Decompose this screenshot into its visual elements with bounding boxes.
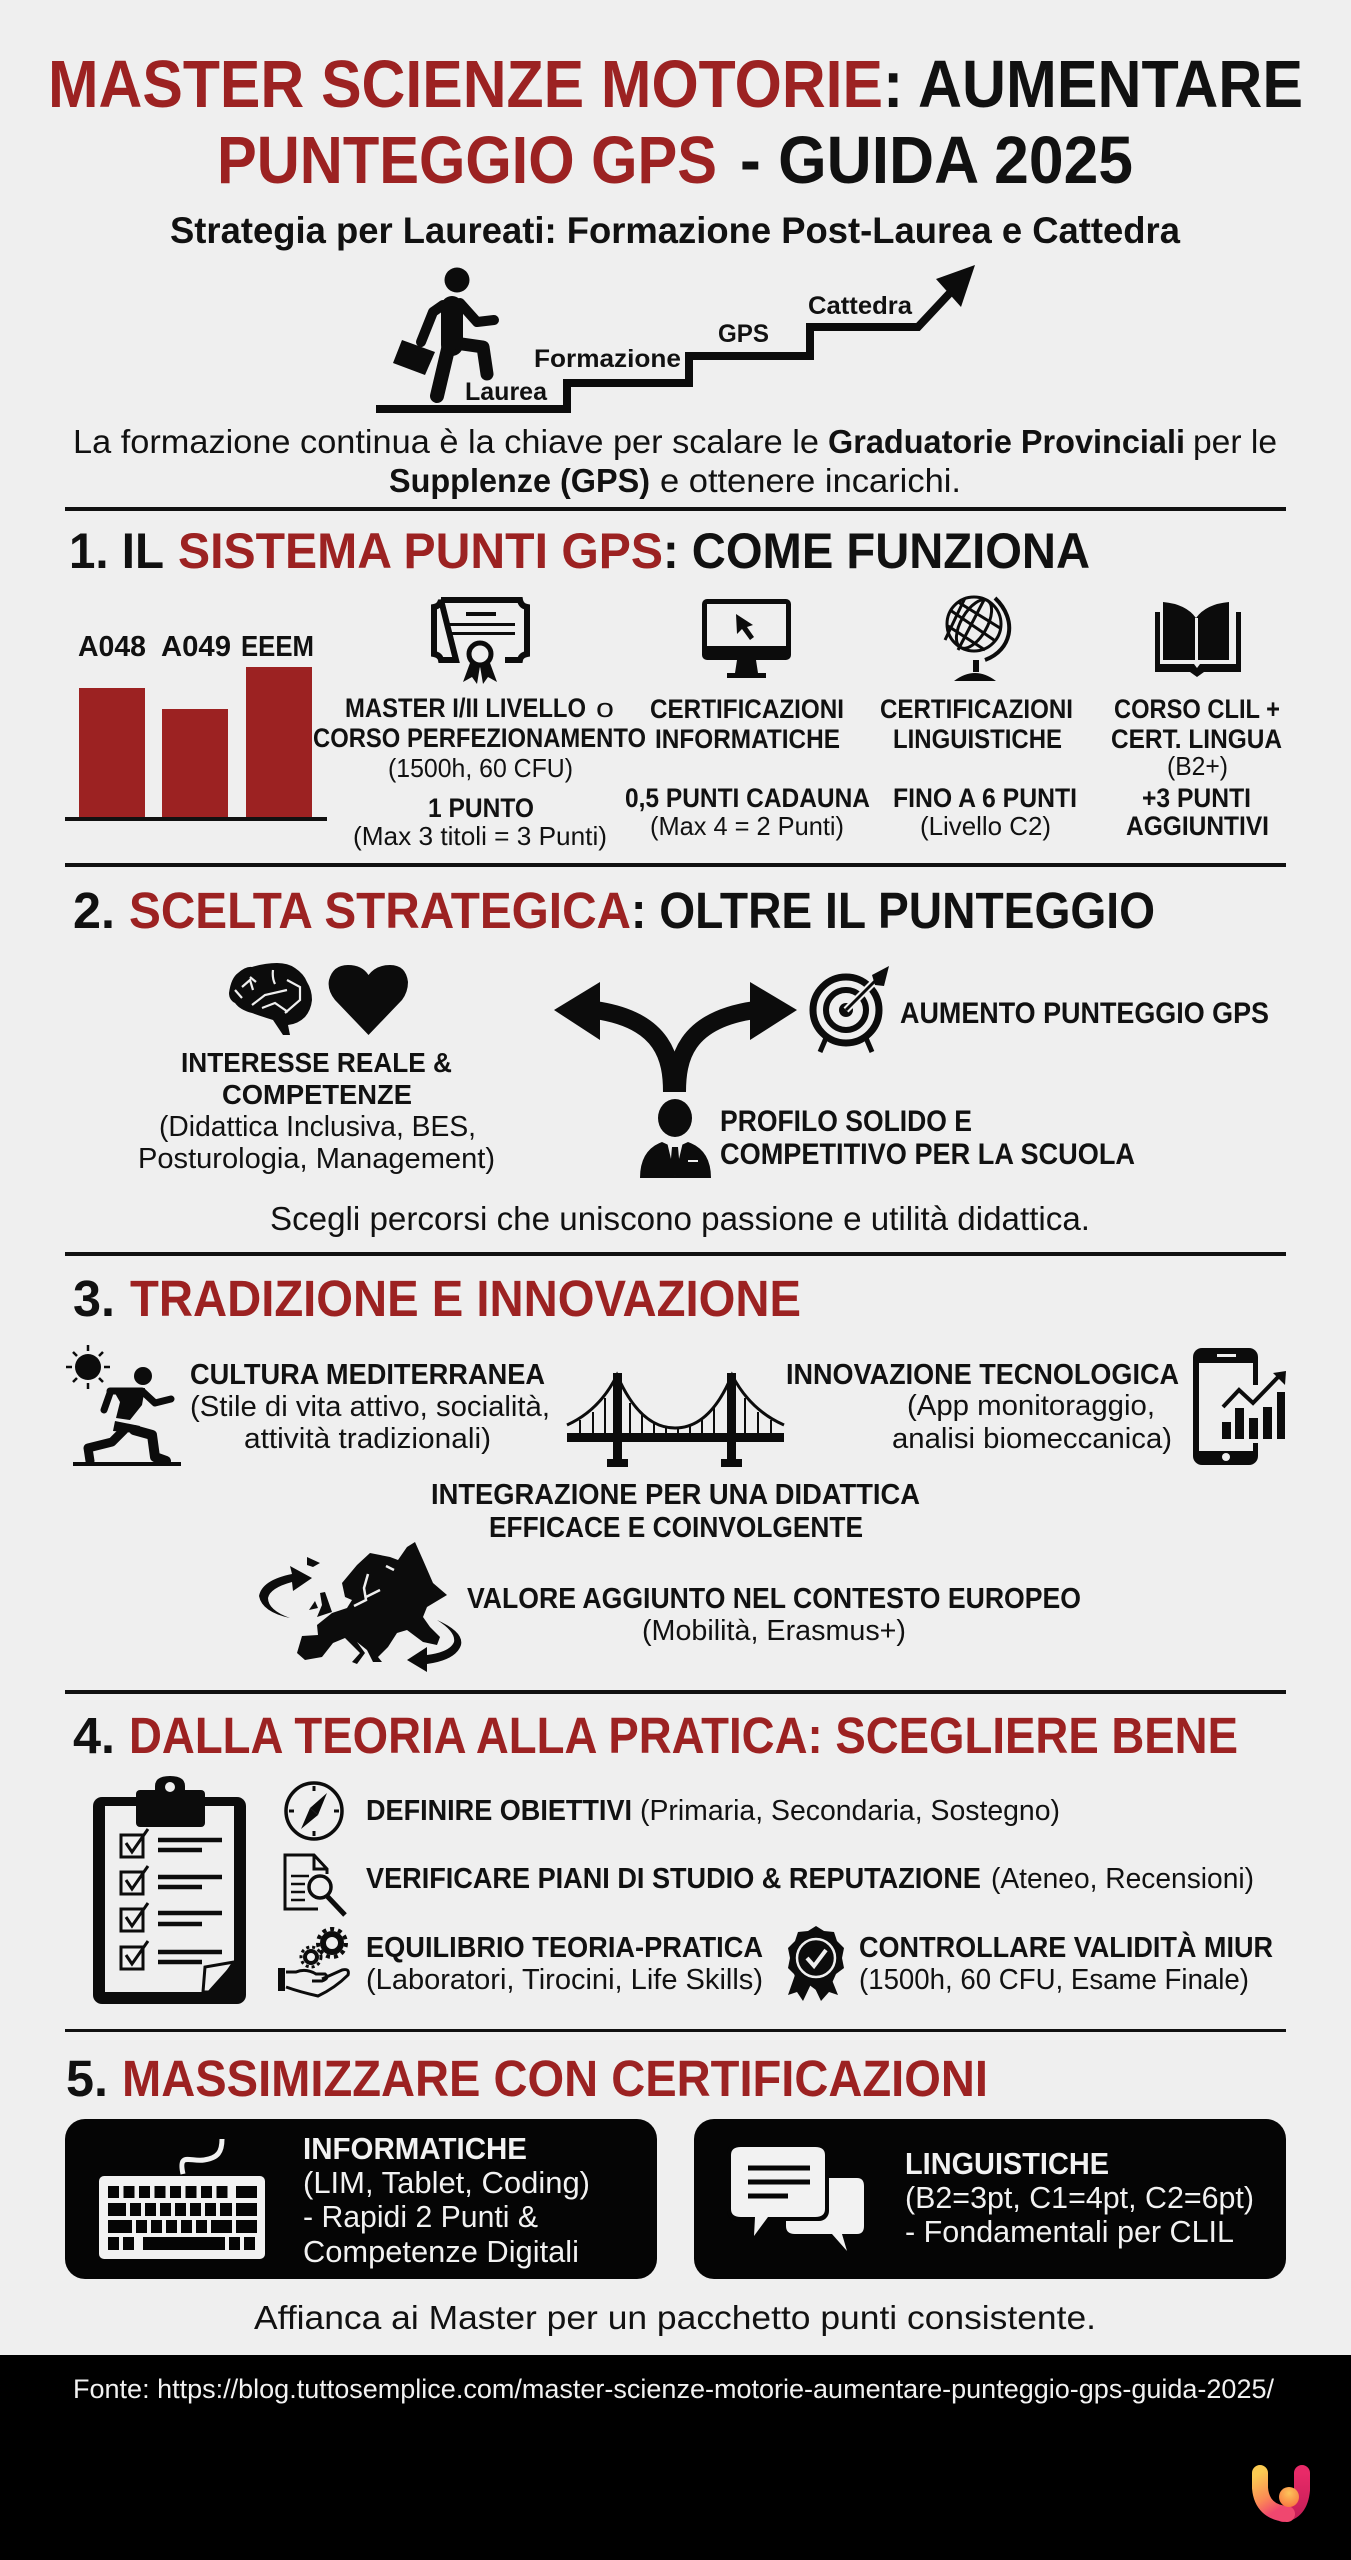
footer band [0, 2355, 1351, 2560]
text: master column: o [596, 693, 614, 723]
text: definire obiettivi: (Primaria, Secondaria, Sostegno) [640, 1795, 1060, 1827]
icon: open book [1155, 602, 1241, 677]
title: - GUIDA 2025 [740, 123, 1133, 198]
icon: map of Europe with arrows [259, 1542, 461, 1672]
heading: section 4: 4. [73, 1707, 115, 1764]
text: interesse reale: INTERESSE REALE & [181, 1047, 452, 1078]
text: informatiche column: 0,5 PUNTI CADAUNA [625, 783, 870, 813]
heading: section 2 [73, 882, 1155, 939]
heading: section 5: MASSIMIZZARE CON CERTIFICAZIONI [122, 2050, 988, 2107]
text: equilibrio teoria-pratica [366, 1932, 763, 1996]
source text: Fonte: https://blog.tuttosemplice.com/master-scienze-motorie-aumentare-punteggio-gps-guida-2025/ [73, 2374, 1274, 2404]
text: innovazione tecnologica [786, 1359, 1179, 1455]
icon: quality badge [788, 1926, 844, 2001]
text: definire obiettivi [366, 1795, 1060, 1827]
text: valore aggiunto: (Mobilità, Erasmus+) [642, 1615, 906, 1647]
icon: gears and hand [278, 1929, 348, 1996]
text: linguistiche: (B2=3pt, C1=4pt, C2=6pt) [905, 2180, 1254, 2215]
text: interesse reale: (Didattica Inclusiva, BES, [159, 1111, 476, 1143]
text: cultura mediterranea [190, 1359, 550, 1455]
text: CLIL column: AGGIUNTIVI [1126, 811, 1269, 841]
text: profilo solido: PROFILO SOLIDO E [720, 1105, 972, 1138]
intro text: Graduatorie Provinciali [828, 423, 1185, 460]
bar chart: EEEM [241, 631, 314, 663]
text: interesse reale: Posturologia, Management) [138, 1143, 495, 1175]
intro text: e ottenere incarichi. [660, 462, 961, 499]
text: linguistiche: LINGUISTICHE [905, 2146, 1109, 2181]
text: verificare piani: VERIFICARE PIANI DI STUDIO & REPUTAZIONE [366, 1863, 981, 1895]
text: linguistiche column [880, 694, 1077, 841]
title: : AUMENTARE [883, 47, 1303, 122]
text: linguistiche [905, 2146, 1254, 2249]
text: equilibrio teoria-pratica: (Laboratori, Tirocini, Life Skills) [366, 1964, 763, 1996]
title: PUNTEGGIO GPS [217, 123, 717, 198]
heading: section 1 [69, 523, 1090, 579]
text: informatiche: Competenze Digitali [303, 2234, 579, 2269]
icon: professional bust [640, 1099, 711, 1178]
text: integrazione: INTEGRAZIONE PER UNA DIDATTICA [431, 1479, 920, 1511]
text: definire obiettivi: DEFINIRE OBIETTIVI [366, 1795, 632, 1827]
icon: document with magnifier [285, 1855, 345, 1915]
text: profilo solido [720, 1105, 1135, 1171]
text: CLIL column: (B2+) [1167, 751, 1228, 781]
heading: section 2: SCELTA STRATEGICA [129, 882, 631, 939]
text: linguistiche column: CERTIFICAZIONI [880, 694, 1073, 724]
icon: logo [1260, 2473, 1302, 2514]
text: controllare validita: CONTROLLARE VALIDITÀ MIUR [859, 1930, 1273, 1964]
heading: section 2: 2. [73, 882, 115, 939]
subtitle: Strategia per Laureati: Formazione Post-Laurea e Cattedra [170, 210, 1180, 251]
icon: sun [66, 1345, 110, 1389]
icon: globe [945, 594, 1009, 681]
text: informatiche: (LIM, Tablet, Coding) [303, 2165, 590, 2200]
text: verificare piani: (Ateneo, Recensioni) [991, 1863, 1254, 1895]
text: informatiche column: (Max 4 = 2 Punti) [650, 811, 844, 841]
text: valore aggiunto: VALORE AGGIUNTO NEL CONTESTO EUROPEO [467, 1583, 1081, 1615]
text: master column: 1 PUNTO [428, 793, 534, 823]
heading: section 3: 3. [73, 1270, 115, 1327]
text: master column: (1500h, 60 CFU) [388, 753, 573, 783]
heading: section 1: : COME FUNZIONA [663, 523, 1090, 579]
text: aumento punteggio: AUMENTO PUNTEGGIO GPS [900, 997, 1269, 1030]
heading: section 4: DALLA TEORIA ALLA PRATICA: SCEGLIERE BENE [129, 1707, 1238, 1764]
icon: career stairs with businessman: Cattedra [808, 292, 913, 320]
text: informatiche column: INFORMATICHE [655, 724, 840, 754]
text: master column: CORSO PERFEZIONAMENTO [313, 723, 646, 753]
icon: keyboard [99, 2139, 265, 2259]
text: section 2 note: Scegli percorsi che uniscono passione e utilità didattica. [270, 1200, 1090, 1237]
icon: career stairs with businessman [376, 265, 975, 409]
text: cultura mediterranea: (Stile di vita attivo, socialità, [190, 1391, 550, 1423]
intro text: per le [1193, 423, 1277, 460]
icon: certificate [434, 600, 527, 684]
text: master column: (Max 3 titoli = 3 Punti) [353, 821, 607, 851]
text: integrazione: EFFICACE E COINVOLGENTE [489, 1512, 863, 1544]
icon: smartphone with chart [1193, 1348, 1286, 1465]
text: valore aggiunto [467, 1583, 1081, 1647]
text: CLIL column: +3 PUNTI [1142, 783, 1251, 813]
title [48, 47, 1303, 198]
icon: runner [73, 1367, 181, 1466]
text: integrazione [431, 1479, 920, 1544]
text: CLIL column [1111, 694, 1282, 841]
heading: section 1: SISTEMA PUNTI GPS [178, 523, 663, 579]
heading: section 2: : OLTRE IL PUNTEGGIO [631, 882, 1155, 939]
icon: career stairs with businessman: Laurea [465, 378, 548, 406]
heading: section 1: 1. IL [69, 523, 164, 579]
icon: forking arrow [554, 982, 797, 1092]
icon: career stairs with businessman: GPS [718, 320, 769, 348]
text: informatiche: INFORMATICHE [303, 2131, 527, 2166]
icon: career stairs with businessman: Formazione [534, 345, 681, 373]
text: informatiche column: CERTIFICAZIONI [650, 694, 844, 724]
panel: linguistiche [694, 2119, 1286, 2279]
text: cultura mediterranea: CULTURA MEDITERRANEA [190, 1359, 545, 1391]
heading: section 3: TRADIZIONE E INNOVAZIONE [130, 1270, 801, 1327]
text: linguistiche: - Fondamentali per CLIL [905, 2214, 1234, 2249]
text: controllare validita: (1500h, 60 CFU, Esame Finale) [859, 1964, 1249, 1996]
text: equilibrio teoria-pratica: EQUILIBRIO TEORIA-PRATICA [366, 1932, 763, 1964]
icon: heart [329, 965, 408, 1035]
icon: suspension bridge [567, 1373, 784, 1467]
text: section 5 note: Affianca ai Master per un pacchetto punti consistente. [254, 2299, 1096, 2336]
bar chart: A049 [161, 631, 231, 663]
text: profilo solido: COMPETITIVO PER LA SCUOLA [720, 1138, 1135, 1171]
title: MASTER SCIENZE MOTORIE [48, 47, 883, 122]
text: master column: MASTER I/II LIVELLO [345, 693, 586, 723]
text: CLIL column: CERT. LINGUA [1111, 724, 1282, 754]
heading: section 5: 5. [66, 2050, 108, 2107]
text: innovazione tecnologica: (App monitoraggio, [907, 1390, 1155, 1422]
text: innovazione tecnologica: INNOVAZIONE TECNOLOGICA [786, 1359, 1179, 1391]
text: CLIL column: CORSO CLIL + [1114, 694, 1280, 724]
icon: brain [229, 963, 312, 1035]
icon: speech bubbles [727, 2143, 864, 2251]
bar chart [65, 631, 327, 821]
text: informatiche: - Rapidi 2 Punti & [303, 2199, 538, 2234]
icon: checklist clipboard [93, 1776, 246, 2004]
intro text: Supplenze (GPS) [389, 462, 650, 499]
text: interesse reale [138, 1047, 495, 1175]
panel: informatiche [65, 2119, 657, 2279]
intro text: La formazione continua è la chiave per scalare le [73, 423, 819, 460]
text: interesse reale: COMPETENZE [222, 1079, 412, 1110]
text: linguistiche column: FINO A 6 PUNTI [893, 783, 1077, 813]
text: cultura mediterranea: attività tradizionali) [244, 1423, 491, 1455]
text: linguistiche column: (Livello C2) [920, 811, 1051, 841]
text: master column [313, 693, 646, 851]
text: informatiche column [625, 694, 870, 841]
text: innovazione tecnologica: analisi biomeccanica) [892, 1423, 1172, 1455]
text: controllare validita [859, 1930, 1273, 1996]
intro text [73, 423, 1277, 499]
text: linguistiche column: LINGUISTICHE [893, 724, 1062, 754]
bar chart: A048 [78, 631, 146, 663]
icon: computer monitor [702, 599, 791, 678]
icon: target [813, 966, 889, 1052]
icon: compass [286, 1783, 342, 1839]
text: informatiche [303, 2131, 590, 2269]
